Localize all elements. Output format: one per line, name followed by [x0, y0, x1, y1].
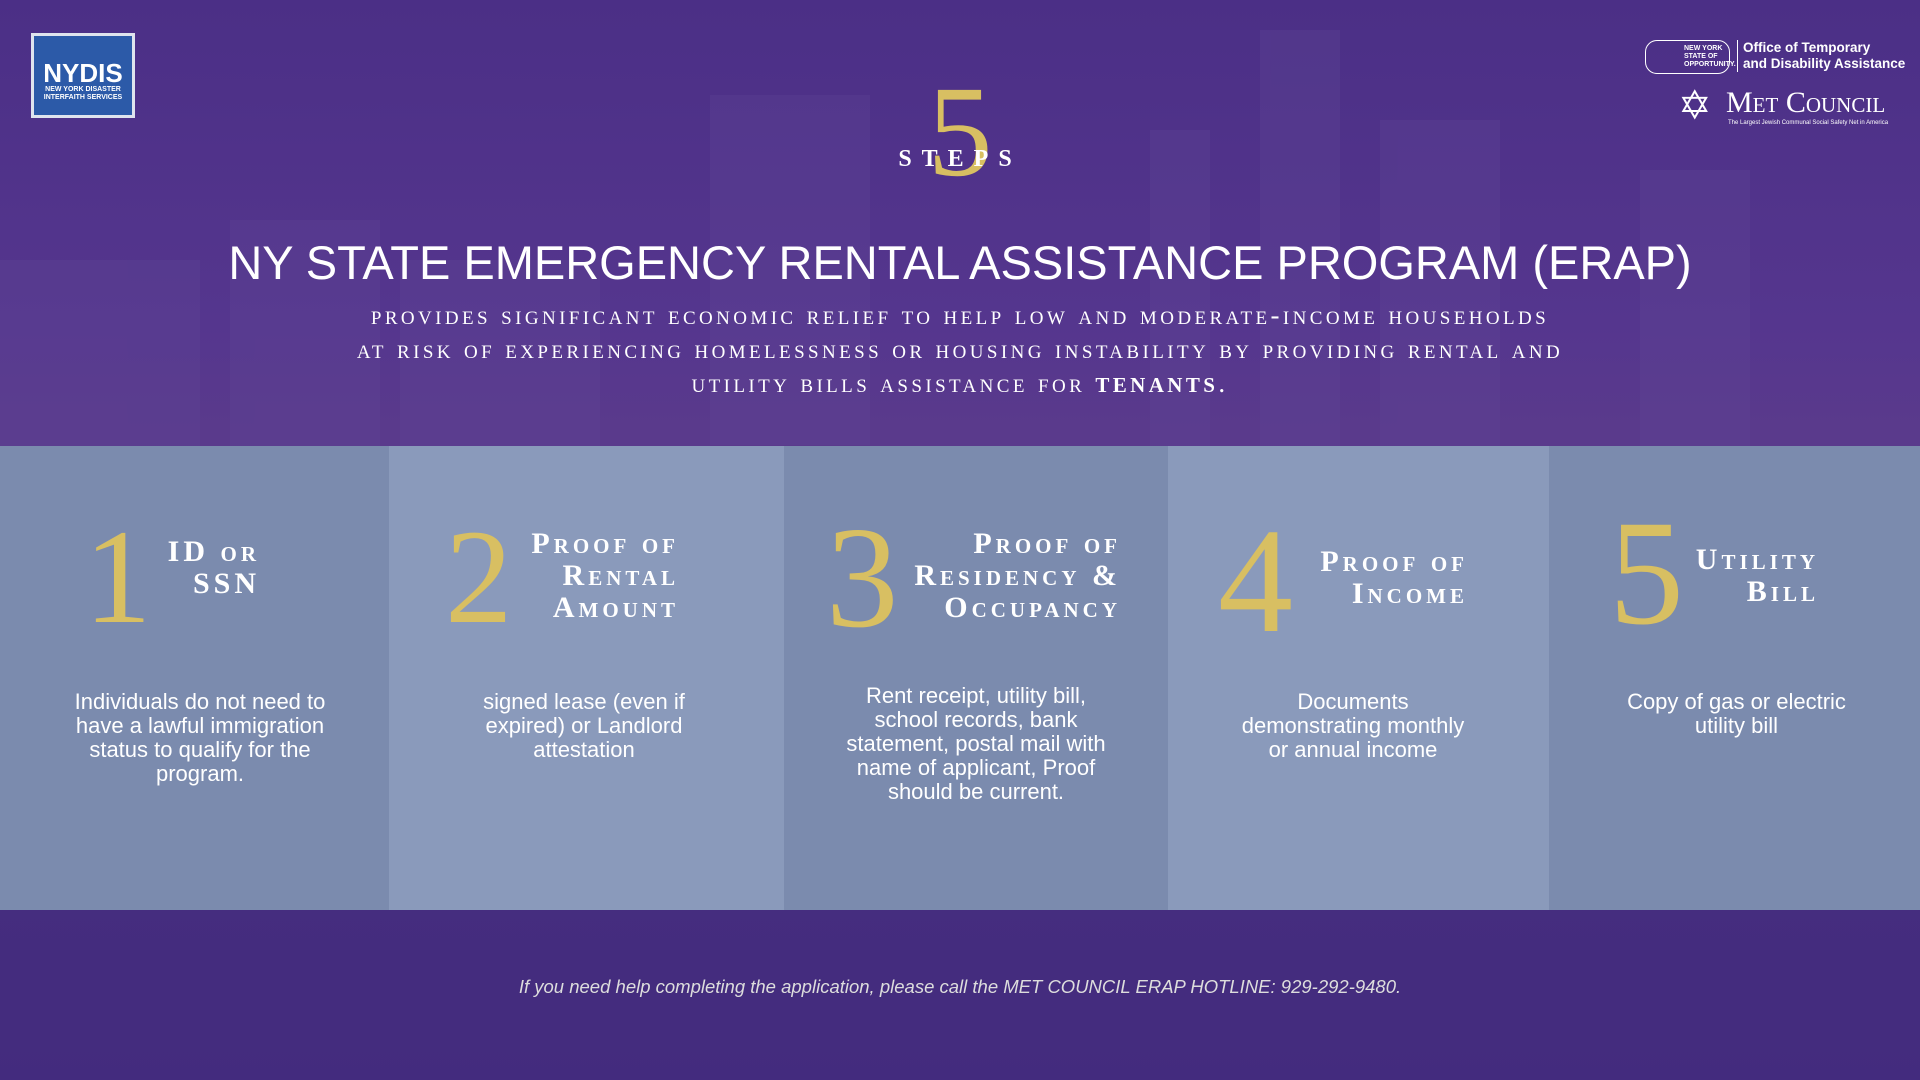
- logo: OTDA: [1645, 40, 1905, 74]
- panel 1: [0, 446, 389, 910]
- logo: OTDA: OPPORTUNITY.: [1684, 61, 1736, 68]
- panel 5: Bill: [1747, 575, 1819, 608]
- title: NY STATE EMERGENCY RENTAL ASSISTANCE PROGRAM (ERAP): [228, 236, 1692, 289]
- panel 3: Rent receipt, utility bill, school records, bank statement, postal mail with name of applicant, Proof should be current.: [846, 683, 1106, 804]
- panel 4: [1168, 446, 1549, 910]
- panel 1: ID or: [168, 535, 260, 568]
- logo: OTDA: STATE OF: [1684, 53, 1718, 60]
- panel 2: signed lease (even if expired) or Landlord attestation: [483, 689, 685, 762]
- subtitle: at risk of experiencing homelessness or housing instability by providing rental and: [357, 334, 1563, 364]
- panel 3: Occupancy: [944, 591, 1121, 624]
- panel 4: Income: [1352, 577, 1468, 610]
- panel 2: Rental: [563, 559, 679, 592]
- logo: OTDA: and Disability Assistance: [1743, 56, 1905, 71]
- logo: Met Council: ✡: [1678, 84, 1712, 128]
- panel 4: Proof of: [1320, 545, 1468, 578]
- panel 2: 2: [445, 503, 512, 652]
- logo: Met Council: [1678, 84, 1888, 128]
- logo: NYDIS: NEW YORK DISASTER: [45, 86, 121, 93]
- panel 3: Residency &: [914, 559, 1121, 592]
- heading: 5 steps: STEPS: [898, 146, 1022, 172]
- heading: 5 steps: 5: [928, 60, 992, 204]
- logo: NYDIS: [31, 33, 135, 118]
- panel 5: 5: [1609, 490, 1684, 656]
- panel 5: [1549, 446, 1920, 910]
- panel 4: 4: [1218, 498, 1293, 664]
- subtitle: [357, 300, 1563, 399]
- panel 5: Utility: [1696, 543, 1819, 576]
- panel 3: [784, 446, 1168, 910]
- logo: OTDA: NEW YORK: [1684, 45, 1722, 52]
- heading: 5 steps: [898, 60, 1022, 204]
- panel 5: Copy of gas or electric utility bill: [1627, 689, 1846, 738]
- panel 3: 3: [826, 498, 898, 658]
- logo: NYDIS: INTERFAITH SERVICES: [44, 94, 122, 101]
- panel 2: Amount: [553, 591, 679, 624]
- subtitle: provides significant economic relief to help low and moderate-income households: [371, 300, 1549, 330]
- panel 2: [389, 446, 784, 910]
- logo: Met Council: The Largest Jewish Communal Social Safety Net in America: [1728, 120, 1888, 126]
- panel 1: SSN: [193, 567, 260, 600]
- footer hotline: If you need help completing the application, please call the MET COUNCIL ERAP HOTLINE: 929-292-9480.: [519, 976, 1401, 997]
- panel 3: Proof of: [973, 527, 1121, 560]
- panel 1: Individuals do not need to have a lawful immigration status to qualify for the program.: [75, 689, 325, 786]
- panel 1: 1: [84, 503, 152, 652]
- subtitle: utility bills assistance for tenants.: [692, 366, 1228, 399]
- logo: NYDIS: NYDIS: [43, 58, 123, 88]
- panel 2: Proof of: [531, 527, 679, 560]
- panel 4: Documents demonstrating monthly or annual income: [1242, 689, 1464, 762]
- logo: Met Council: Met Council: [1726, 86, 1885, 119]
- logo: OTDA: Office of Temporary: [1743, 40, 1870, 55]
